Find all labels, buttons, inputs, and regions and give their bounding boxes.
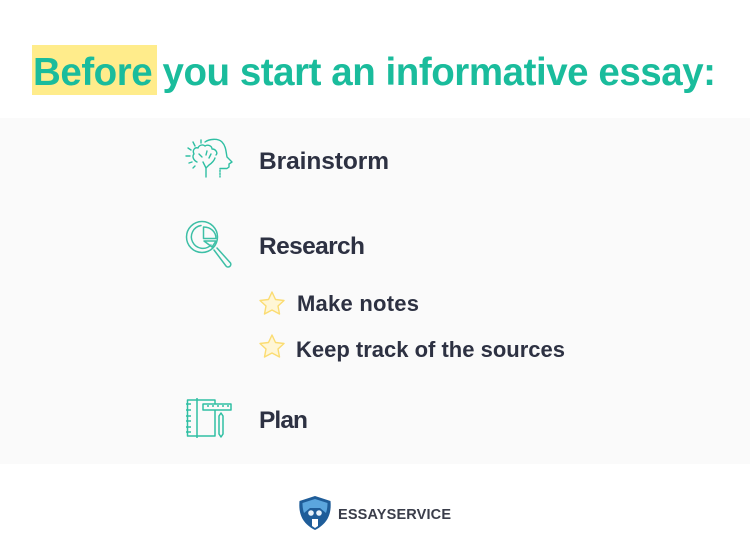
- logo: EssayService: [299, 496, 451, 530]
- panel: steps background: [0, 118, 750, 464]
- title highlight: [32, 45, 157, 95]
- wordmark: ESSAYSERVICE: [338, 507, 451, 523]
- title: [32, 45, 716, 95]
- icon: star: [260, 292, 284, 314]
- icon: brain and head: [186, 139, 232, 177]
- icon: magnifier with pie chart: [186, 222, 231, 267]
- text: Keep track of the sources: Keep track of the sources: [296, 337, 565, 362]
- text: Make notes: Make notes: [297, 291, 419, 316]
- icon: notebook, ruler and pencil: [186, 398, 231, 438]
- heading: Plan: Plan: [259, 407, 308, 434]
- icon: star: [260, 335, 284, 357]
- icon: owl shield: [299, 496, 331, 530]
- title text: Before you start an informative essay:: [33, 51, 716, 94]
- heading: Research: Research: [259, 233, 365, 260]
- heading: Brainstorm: Brainstorm: [259, 148, 389, 175]
